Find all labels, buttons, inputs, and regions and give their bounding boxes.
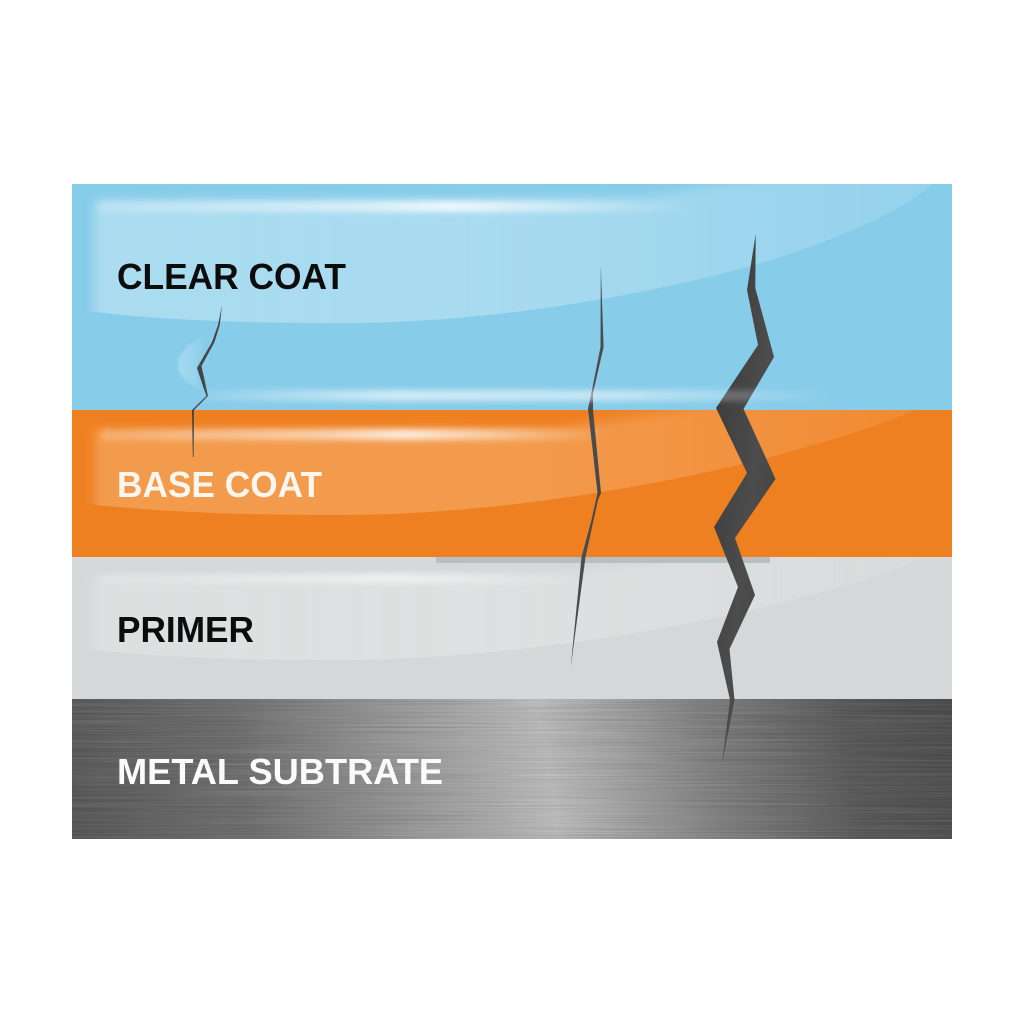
panel: primer layer [72, 550, 960, 699]
clear coat top highlight [98, 201, 688, 212]
clear coat lower highlight [205, 390, 835, 401]
panel: base coat layer [72, 400, 960, 557]
primer highlight [100, 574, 580, 583]
panel: metal substrate layer [72, 699, 952, 839]
label: base coat: BASE COAT [117, 464, 322, 505]
infographic: paint layer cross-section [72, 184, 952, 839]
crack: medium crack [571, 266, 604, 668]
base coat gloss [90, 410, 914, 515]
base coat highlight [100, 429, 610, 440]
label: clear coat: CLEAR COAT [117, 256, 346, 297]
crack: small hairline crack [178, 305, 222, 457]
crack: large crack [714, 234, 776, 764]
primer gloss [100, 581, 592, 660]
panel: clear coat layer [72, 172, 960, 410]
label: metal substrate: METAL SUBTRATE [117, 751, 443, 792]
crack halo [178, 336, 206, 390]
label: primer: PRIMER [117, 609, 254, 650]
shadow strip under base coat [436, 557, 770, 563]
clear coat gloss [90, 184, 932, 323]
brushed metal texture [72, 699, 952, 839]
small crack shape [192, 305, 222, 457]
